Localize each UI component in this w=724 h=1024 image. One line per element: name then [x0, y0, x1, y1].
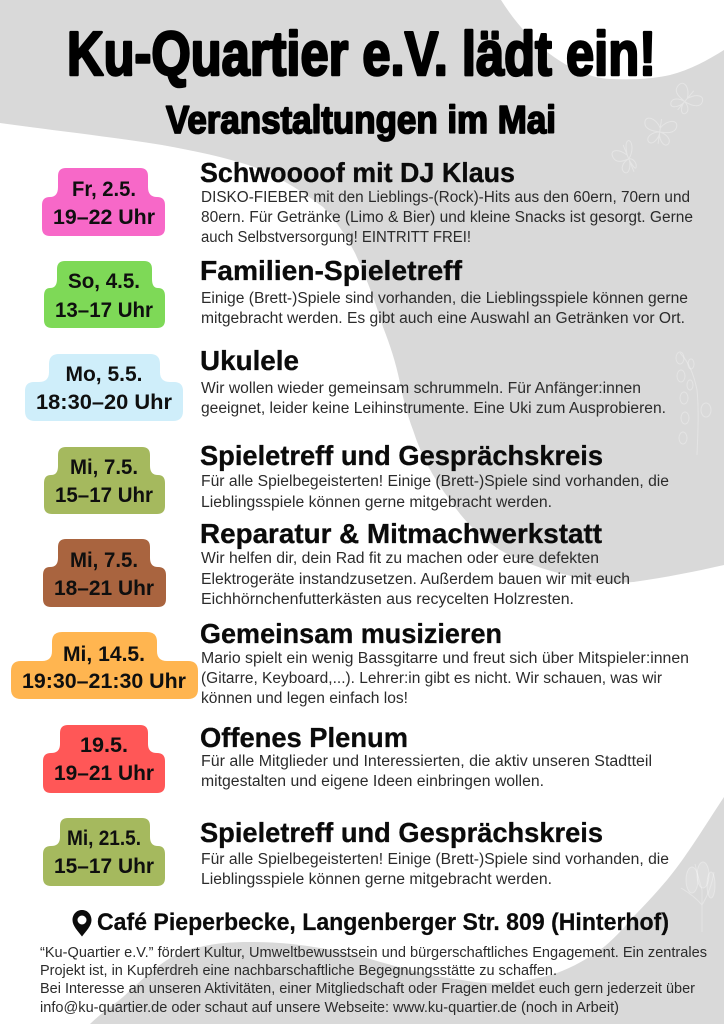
event description: auch Selbstversorgung! EINTRITT FREI! [201, 229, 471, 246]
footer text [40, 944, 707, 1016]
location text: Café Pieperbecke, Langenberger Str. 809 (Hinterhof) [97, 909, 669, 936]
event description: Wir helfen dir, dein Rad fit zu machen oder eure defekten [201, 550, 599, 567]
event description [201, 753, 652, 790]
event description: Lieblingsspiele können gerne mitgebracht werden. [201, 494, 552, 511]
event description [201, 650, 689, 707]
event 8 [43, 817, 669, 888]
event description: Mario spielt ein wenig Bassgitarre und freut sich über Mitspieler:innen [201, 650, 689, 667]
icon: butterfly bottom [609, 140, 642, 177]
date badge: Fr 2.5.: 19–22 Uhr [53, 206, 155, 229]
event description: Für alle Spielbegeisterten! Einige (Brett-)Spiele sind vorhanden, die [201, 851, 669, 868]
footer text: “Ku-Quartier e.V.” fördert Kultur, Umweltbewusstsein und bürgerschaftliches Engagement. Ein zentrales [40, 944, 707, 961]
event description: Einige (Brett-)Spiele sind vorhanden, die Lieblingsspiele können gerne [201, 290, 688, 307]
footer text: Bei Interesse an unseren Aktivitäten, einer Mitgliedschaft oder Fragen meldet euch gern jederzeit über [40, 980, 695, 997]
event 1 [42, 157, 693, 246]
icon: butterfly middle [642, 117, 677, 146]
event heading: Spieletreff und Gesprächskreis [200, 817, 603, 848]
icon: map pin [72, 910, 92, 936]
event 7 [43, 722, 652, 793]
event 2 [44, 255, 688, 328]
date badge: Mi 7.5. 18-21 [43, 539, 166, 607]
event 5 [43, 518, 630, 608]
event description [201, 851, 669, 888]
event description [201, 380, 666, 417]
event description: Für alle Spielbegeisterten! Einige (Brett-)Spiele sind vorhanden, die [201, 473, 669, 490]
decoration: butterflies [609, 81, 705, 177]
background shape: lower grey blob [90, 797, 724, 1024]
subtitle: Veranstaltungen im Mai [166, 99, 556, 142]
location line [72, 909, 669, 936]
event description: können und legen einfach los! [201, 690, 408, 707]
event description: Lieblingsspiele können gerne mitgebracht werden. [201, 871, 552, 888]
date badge: Mi 21.5. [43, 818, 165, 886]
event description: 80ern. Für Getränke (Limo & Bier) und kleine Snacks ist gesorgt. Gerne [201, 209, 693, 226]
event description [201, 473, 669, 511]
icon: butterfly top [665, 81, 705, 120]
decoration: sprig right [676, 352, 711, 455]
event description: Eichhörnchenfutterkästen aus recycelten Holzresten. [201, 591, 574, 608]
date badge: Mi 14.5.: 19:30–21:30 Uhr [22, 670, 186, 693]
date badge: 19.5.: 19.5. [80, 734, 128, 757]
decoration: wheat plant lower right [681, 862, 715, 932]
event 3 [25, 345, 666, 421]
event heading: Familien-Spieletreff [200, 255, 463, 286]
event description: Wir wollen wieder gemeinsam schrummeln. Für Anfänger:innen [201, 380, 641, 397]
date badge: Mi 7.5. 18-21: 18–21 Uhr [54, 577, 154, 600]
event description: mitgestalten und eigene Ideen einbringen wollen. [201, 773, 544, 790]
date badge: Mi 7.5. 15-17 [44, 447, 165, 514]
event heading: Schwoooof mit DJ Klaus [200, 157, 515, 188]
date badge: Mi 21.5.: 15–17 Uhr [54, 855, 154, 878]
date badge: 19.5.: 19–21 Uhr [54, 762, 154, 785]
date badge: Mi 7.5. 15-17: Mi, 7.5. [70, 456, 138, 479]
background shape: upper grey blob [0, 0, 724, 583]
event heading: Reparatur & Mitmachwerkstatt [200, 518, 602, 549]
date badge: Mi 7.5. 15-17: 15–17 Uhr [55, 484, 153, 507]
event 4 [44, 440, 669, 514]
event description [201, 290, 688, 327]
footer text: info@ku-quartier.de oder schaut auf unsere Webseite: www.ku-quartier.de (noch in Arbeit) [40, 999, 619, 1016]
date badge: So 4.5. [44, 261, 165, 328]
date badge: Mi 21.5.: Mi, 21.5. [67, 827, 141, 850]
date badge: Mo 5.5. [25, 354, 183, 421]
event description: Für alle Mitglieder und Interessierten, die aktiv unseren Stadtteil [201, 753, 652, 770]
event heading: Spieletreff und Gesprächskreis [200, 440, 603, 471]
date badge: Mo 5.5.: 18:30–20 Uhr [36, 391, 172, 414]
event heading: Offenes Plenum [200, 722, 408, 753]
event heading: Gemeinsam musizieren [200, 618, 502, 649]
date badge: Mo 5.5.: Mo, 5.5. [66, 363, 142, 386]
date badge: So 4.5.: 13–17 Uhr [55, 299, 153, 322]
date badge: Fr 2.5. [42, 168, 165, 236]
event 6 [11, 618, 689, 707]
event description: mitgebracht werden. Es gibt auch eine Auswahl an Getränken vor Ort. [201, 310, 685, 327]
date badge: Mi 14.5.: Mi, 14.5. [63, 643, 145, 666]
footer text: Projekt ist, in Kupferdreh eine nachbarschaftliche Begegnungsstätte zu schaffen. [40, 962, 557, 979]
date badge: Mi 7.5. 18-21: Mi, 7.5. [70, 549, 138, 572]
event description: DISKO-FIEBER mit den Lieblings-(Rock)-Hits aus den 60ern, 70ern und [201, 189, 690, 206]
event heading: Ukulele [200, 345, 299, 376]
date badge: Mi 14.5. [11, 632, 198, 699]
event description: Elektrogeräte instandzusetzen. Außerdem bauen wir mit euch [201, 571, 630, 588]
event description [201, 189, 693, 246]
event description: (Gitarre, Keyboard,...). Lehrer:in gibt es nicht. Wir schauen, was wir [201, 670, 662, 687]
event description [201, 550, 630, 608]
event description: geeignet, leider keine Leihinstrumente. Eine Uki zum Ausprobieren. [201, 400, 666, 417]
date badge: So 4.5.: So, 4.5. [68, 270, 140, 293]
date badge: 19.5. [43, 725, 165, 793]
date badge: Fr 2.5.: Fr, 2.5. [72, 178, 136, 201]
